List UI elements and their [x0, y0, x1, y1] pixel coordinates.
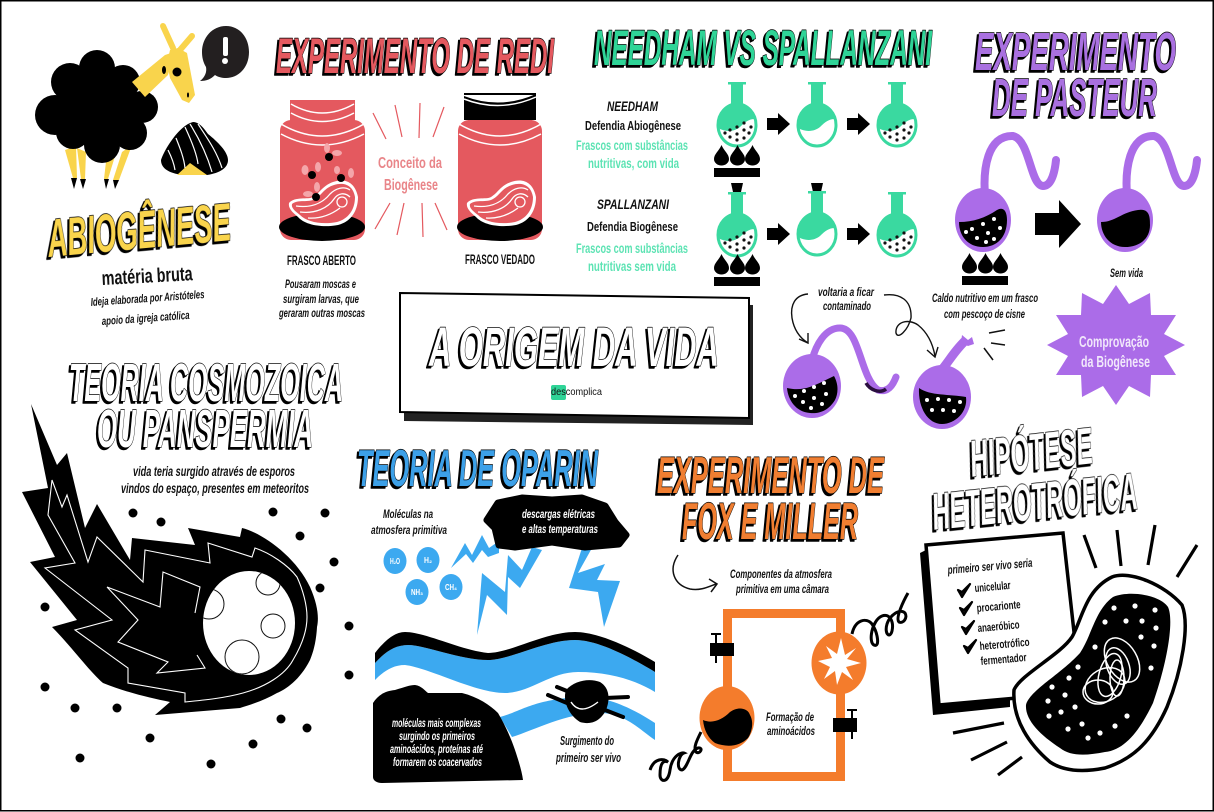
text: moleculas [371, 507, 447, 537]
block: coacervados hill: aminoácidos, proteínas até [390, 744, 483, 756]
text: spallanzani: SPALLANZANI [597, 196, 670, 212]
text: conceito [378, 155, 442, 194]
icon: speech bubble [200, 26, 249, 81]
title: A ORIGEM DA VIDA [428, 315, 719, 378]
icon: meteorite [22, 404, 318, 715]
icon: coil top [852, 593, 908, 645]
text: spallanzani: nutritivas sem vida [588, 258, 676, 274]
panel: a origem da vida [400, 293, 753, 425]
text: formacao: Formação de [766, 710, 814, 724]
arrow: curved to text [673, 555, 717, 592]
text: caldo: com pescoço de cisne [944, 307, 1025, 321]
text: TEORIA COSMOZOICA [69, 353, 343, 413]
text: componentes [730, 567, 832, 596]
panel: experimento de redi [276, 28, 555, 320]
icon: first living being [548, 680, 628, 723]
arrow: curved left [792, 294, 808, 343]
arrow: curved right [884, 295, 938, 357]
text: surgimento: Surgimento do [560, 733, 614, 748]
text: moleculas: Moléculas na [383, 507, 433, 521]
heading: cosmozoica [69, 353, 343, 459]
text: voltaria: contaminado [823, 299, 871, 313]
text: aristoteles: Ideja elaborada por Aristóteles [90, 289, 205, 309]
panel: experimento de fox e miller [650, 447, 908, 780]
text: needham: NEEDHAM [607, 98, 658, 114]
text: moscas: geraram outras moscas [278, 308, 365, 320]
rays: biogenese concept [373, 103, 447, 237]
text: igreja: apoio da igreja católica [101, 310, 190, 328]
text: formacao [766, 710, 815, 738]
list: characteristics: heterotrófico [979, 637, 1030, 653]
block: coacervados hill [373, 685, 523, 783]
panel: needham vs spallanzani [576, 20, 933, 286]
diagram: miller apparatus [700, 614, 866, 776]
icon: contaminated flask intact [783, 328, 896, 418]
heading: abiogenese: ABIOGÊNESE [43, 191, 234, 269]
text: needham: Defendia Abiogênese [585, 118, 681, 133]
text: surgimento [555, 733, 621, 765]
panel: experimento de fox e miller: EXPERIMENTO DE [657, 447, 885, 505]
text: primeiro ser vivo: primeiro ser vivo seria [946, 556, 1033, 577]
text: voltaria [818, 285, 875, 313]
panel: experimento de pasteur [783, 22, 1197, 429]
text: moscas [278, 279, 365, 320]
icon: coil bottom [650, 732, 701, 780]
burst: comprovacao da biogenese: da Biogênese [1081, 354, 1150, 371]
paper: list [920, 533, 1076, 715]
text: moscas: surgiram larvas, que [283, 294, 359, 306]
text: esporos: vida teria surgido através de esporos [133, 463, 295, 479]
flask row: needham [714, 82, 916, 177]
text: EXPERIMENTO DE REDI [276, 28, 555, 84]
block: coacervados hill: formarem os coacervados [393, 757, 482, 769]
block: coacervados hill: moléculas mais complexas [392, 718, 481, 730]
text: componentes: primitiva em uma câmara [735, 582, 829, 596]
text: esporos: vindos do espaço, presentes em meteoritos [121, 480, 309, 496]
icon: molecules: NH₃ [411, 588, 423, 597]
heading: fox e miller: FOX E MILLER [682, 493, 858, 551]
icon: molecules: H₂ [424, 556, 432, 565]
heading: cosmozoica: OU PANSPERMIA [97, 399, 313, 459]
icon: molecules: H₂O [390, 557, 400, 566]
text: materia bruta: matéria bruta [101, 263, 194, 290]
text: surgimento: primeiro ser vivo [555, 750, 621, 765]
text: sem vida: Sem vida [1110, 268, 1143, 280]
text: caldo [932, 291, 1038, 321]
list: characteristics [958, 580, 1030, 668]
text: needham: Frascos com substâncias [576, 137, 688, 153]
icon: storm cloud: e altas temperaturas [522, 522, 598, 536]
icon: bacterium cell [1014, 575, 1185, 770]
text: componentes: Componentes da atmosfera [730, 567, 832, 581]
label: frasco vedado: FRASCO VEDADO [465, 252, 535, 267]
flask row: spallanzani [714, 183, 916, 286]
text: needham [576, 98, 688, 171]
icon: waves [375, 632, 655, 740]
text: esporos [121, 463, 309, 496]
icon: molecules: CH₄ [445, 583, 457, 592]
icon: rock [161, 122, 228, 175]
icon: sheep [35, 26, 195, 189]
icon: swan neck flask with broth [955, 136, 1056, 285]
text: spallanzani [576, 196, 688, 274]
heading: pasteur [975, 22, 1176, 128]
arrow: pasteur [1035, 200, 1081, 248]
heading: fox e miller [657, 447, 885, 551]
text: spallanzani: Frascos com substâncias [576, 240, 688, 256]
label: frasco aberto: FRASCO ABERTO [287, 253, 356, 268]
text: needham: nutritivas, com vida [588, 155, 679, 171]
text: moscas: Pousaram moscas e [285, 279, 356, 291]
rays: bacterium [953, 525, 1197, 775]
icon: storm cloud [487, 498, 626, 547]
icon: swan neck flask without life [1097, 136, 1197, 252]
burst: comprovacao da biogenese [1047, 285, 1185, 405]
list: characteristics: unicelular [974, 580, 1011, 595]
text: spallanzani: Defendia Biogênese [587, 219, 678, 234]
text: moleculas: atmosfera primitiva [371, 523, 447, 537]
list: characteristics: procarionte [976, 599, 1021, 615]
panel: teoria de oparin: TEORIA DE OPARIN [357, 440, 599, 498]
block: coacervados hill: surgindo os primeiros [399, 731, 475, 743]
panel: teoria de oparin [357, 440, 655, 783]
rays: broken neck [984, 330, 1005, 360]
icon: sealed jar [457, 93, 543, 241]
icon: molecules [384, 547, 462, 605]
icon: lightning [451, 535, 620, 635]
burst: comprovacao da biogenese: Comprovação [1079, 334, 1149, 351]
panel: abiogenese [35, 26, 249, 328]
dots: spores [40, 508, 354, 768]
icon: storm cloud: descargas elétricas [522, 507, 595, 521]
text: conceito: Biogênese [384, 177, 438, 194]
logo: descomplica: descomplica [551, 386, 602, 398]
text: conceito: Conceito da [378, 155, 442, 172]
icon: open jar [279, 100, 365, 241]
text: voltaria: voltaria a ficar [818, 285, 875, 299]
list: characteristics: anaeróbico [977, 619, 1020, 635]
panel: hipotese heterotrofica [920, 417, 1197, 775]
panel: teoria cosmozoica [22, 353, 354, 768]
list: characteristics: fermentador [980, 652, 1027, 668]
icon: contaminated flask broken [913, 335, 974, 429]
text: caldo: Caldo nutritivo em um frasco [932, 291, 1038, 305]
text: formacao: aminoácidos [767, 724, 815, 738]
